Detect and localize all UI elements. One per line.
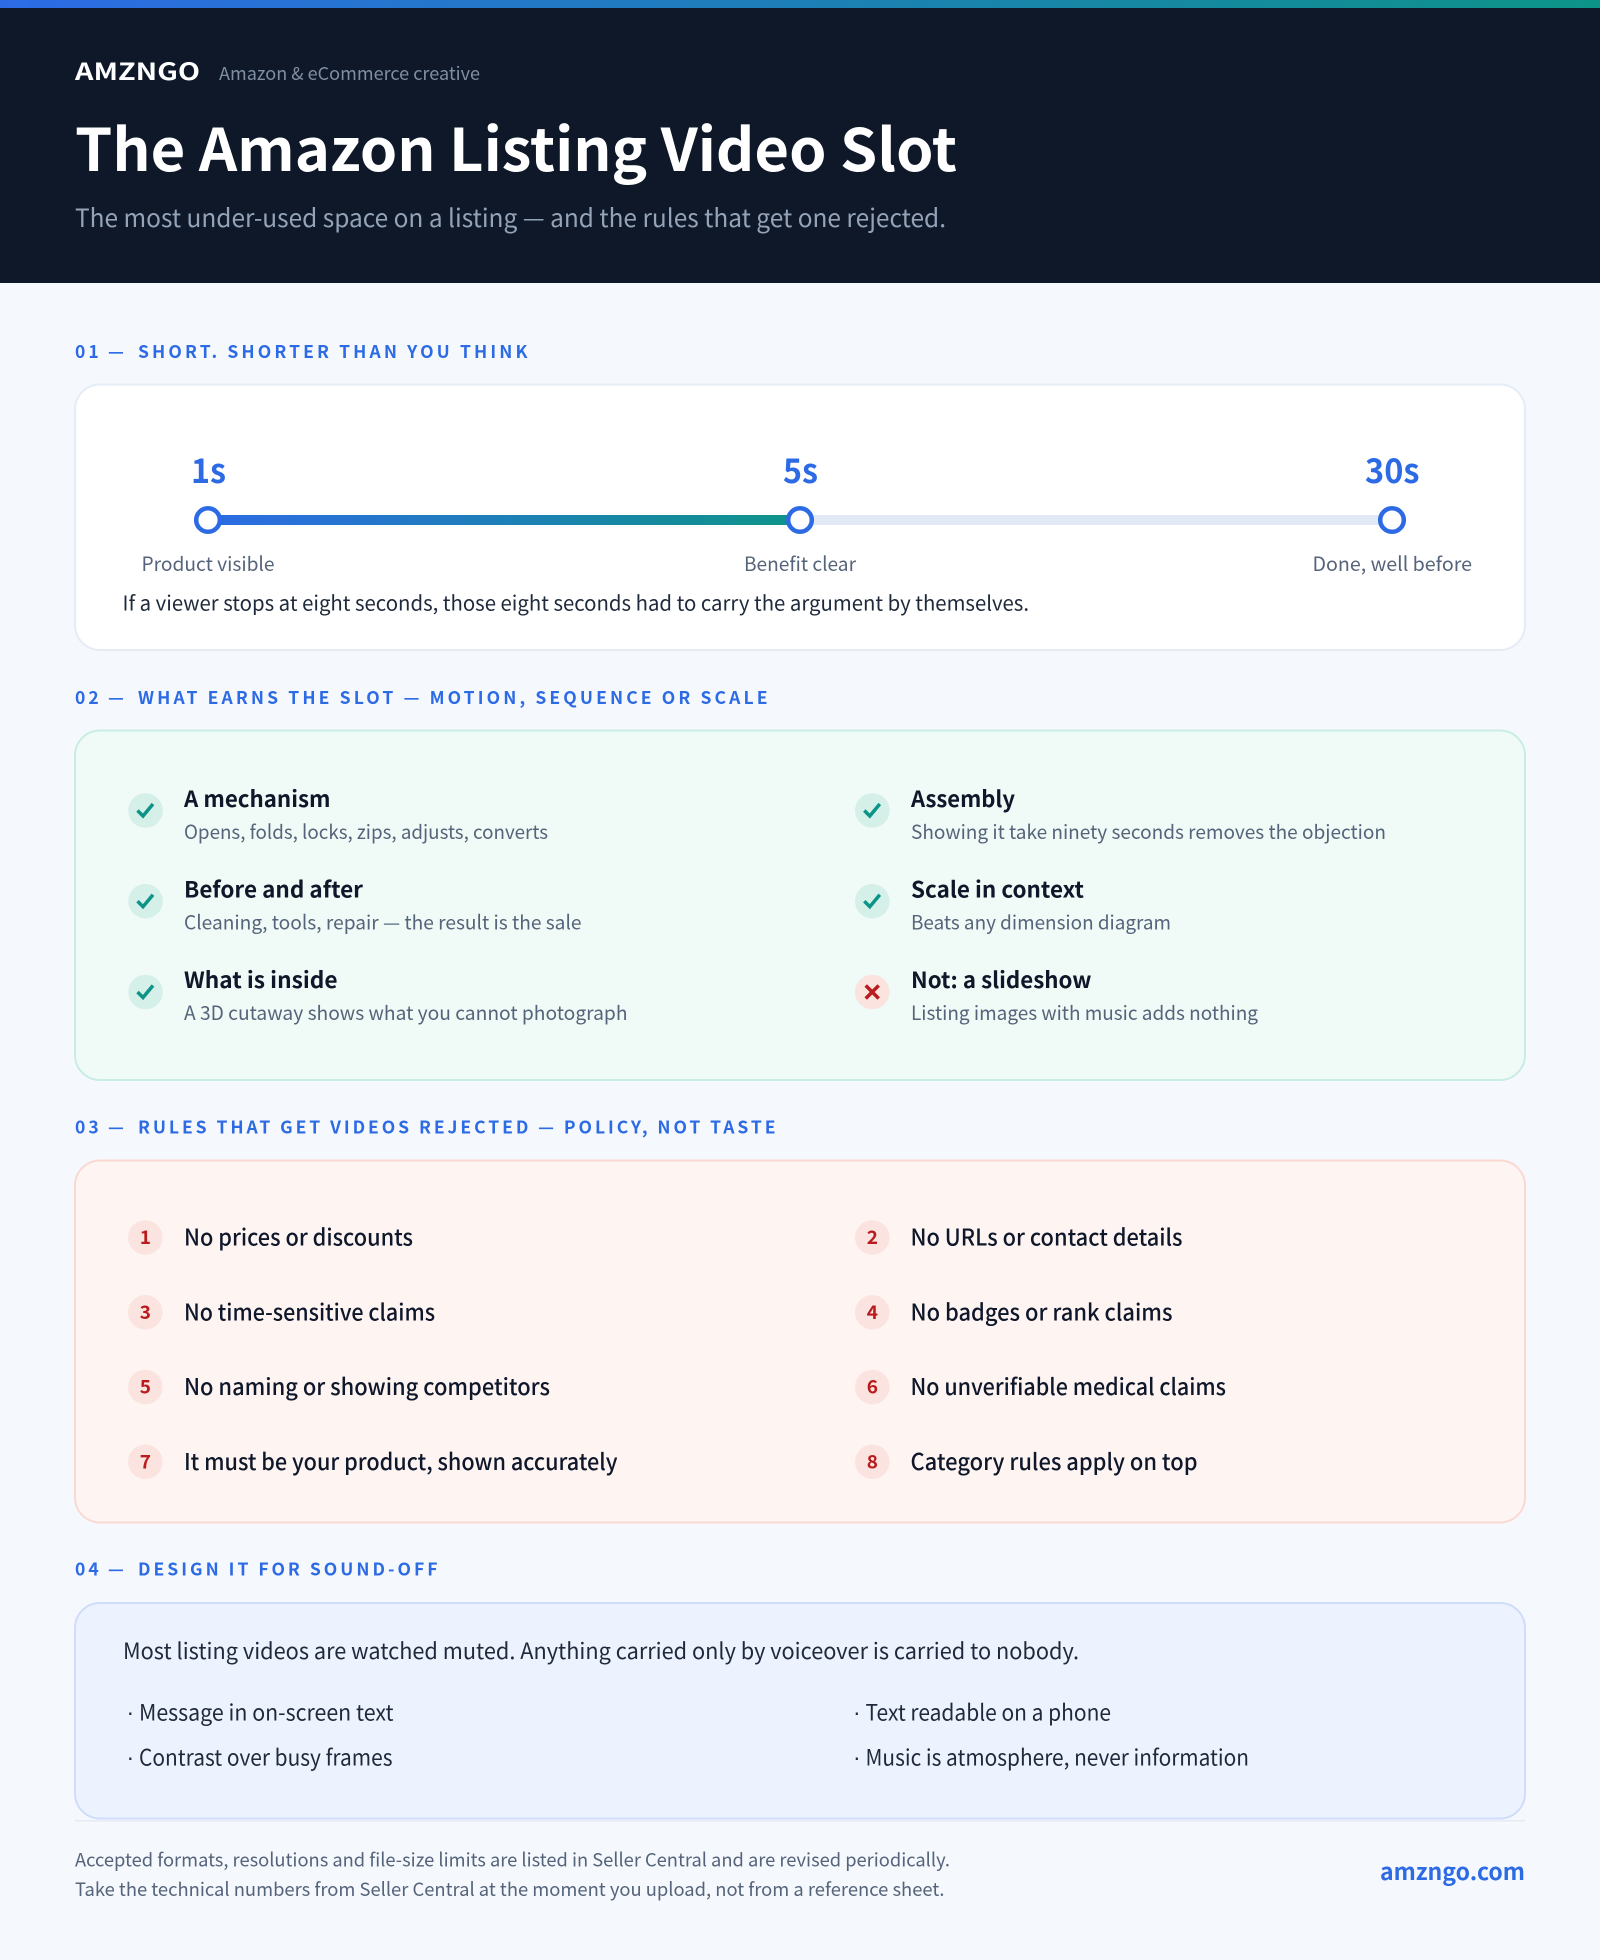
item: not a slideshow [855, 963, 1258, 1026]
item: assembly: Showing it take ninety seconds removes the objection [911, 816, 1386, 845]
heading: section 02: 02 [75, 685, 102, 710]
panel: rejection rules [75, 1160, 1525, 1522]
heading: section 02: — [108, 685, 127, 710]
heading: section 03: RULES THAT GET VIDEOS REJECTED — POLICY, NOT TASTE [138, 1114, 776, 1140]
bullet: readable: · [853, 1699, 861, 1725]
footer url: amzngo.com [1380, 1853, 1525, 1887]
panel: sound-off [75, 1603, 1525, 1818]
rule 8: Category rules apply on top [910, 1443, 1198, 1477]
rule 7: It must be your product, shown accurately [184, 1443, 618, 1477]
timeline track [208, 515, 1392, 525]
marker: 30s: 30s [1365, 444, 1420, 493]
rule 2: No URLs or contact details [910, 1219, 1182, 1253]
brand name: AMZNGO [74, 53, 200, 87]
marker: 30s: Done, well before [1312, 548, 1472, 577]
bullet: on-screen text: · [126, 1699, 134, 1725]
heading: section 03: 03 [75, 1114, 102, 1140]
item: a mechanism [128, 782, 548, 845]
item: before and after: Cleaning, tools, repair — the result is the sale [184, 906, 582, 936]
item: scale in context: Beats any dimension diagram [911, 906, 1171, 936]
marker: 5s: Benefit clear [744, 548, 856, 577]
heading: section 03: — [108, 1114, 127, 1140]
item: not a slideshow: Not: a slideshow [911, 963, 1092, 995]
item: before and after: Before and after [184, 872, 363, 904]
item: a mechanism: Opens, folds, locks, zips, adjusts, converts [184, 816, 548, 845]
bullet: contrast: Contrast over busy frames [139, 1740, 392, 1772]
heading: section 01: — [108, 339, 127, 364]
heading: section 04: — [108, 1556, 127, 1582]
marker: 30s [1312, 444, 1472, 577]
rule 3: 3 [140, 1298, 151, 1325]
rule 3: No time-sensitive claims [184, 1293, 435, 1327]
marker: 1s: 1s [191, 444, 226, 493]
footer note [75, 1846, 950, 1902]
subtitle: The most under-used space on a listing — and the rules that get one rejected. [75, 199, 946, 235]
panel: timeline [75, 384, 1525, 650]
rule 4: 4 [867, 1298, 878, 1325]
footer note: Take the technical numbers from Seller Central at the moment you upload, not from a reference sheet. [75, 1876, 944, 1902]
item: scale in context: Scale in context [911, 872, 1085, 904]
rule 1: No prices or discounts [184, 1219, 413, 1253]
panel: what earns the slot [75, 730, 1525, 1080]
heading: section 01: SHORT. SHORTER THAN YOU THINK [138, 339, 528, 364]
item: what is inside [128, 963, 627, 1026]
item: scale in context [855, 872, 1171, 936]
item: a mechanism: A mechanism [183, 782, 330, 814]
rule 6: 6 [867, 1372, 878, 1400]
rule 7: 7 [140, 1447, 151, 1474]
brand tagline: Amazon & eCommerce creative [219, 60, 480, 86]
item: what is inside: A 3D cutaway shows what you cannot photograph [184, 997, 628, 1026]
rule 8: 8 [867, 1447, 878, 1474]
sound-off intro: Most listing videos are watched muted. Anything carried only by voiceover is carried to nobody. [123, 1634, 1079, 1666]
heading: section 04: DESIGN IT FOR SOUND-OFF [138, 1556, 438, 1582]
marker: 5s [744, 444, 856, 577]
heading: section 01: 01 [75, 339, 102, 364]
marker: 1s [142, 444, 274, 577]
item: assembly: Assembly [910, 782, 1015, 814]
footer note: Accepted formats, resolutions and file-size limits are listed in Seller Central and are revised periodically. [75, 1846, 950, 1872]
item: what is inside: What is inside [184, 963, 338, 995]
marker: 5s: 5s [783, 444, 818, 493]
item: not a slideshow: Listing images with music adds nothing [911, 997, 1258, 1026]
header band [0, 0, 1600, 283]
bullet: music: · [853, 1744, 861, 1770]
rule 6: No unverifiable medical claims [910, 1368, 1226, 1402]
bullet: music: Music is atmosphere, never information [866, 1740, 1249, 1772]
heading: section 04: 04 [75, 1556, 102, 1582]
bullet: on-screen text: Message in on-screen text [139, 1696, 394, 1728]
bullet: contrast: · [126, 1744, 134, 1770]
heading: section 02: WHAT EARNS THE SLOT — MOTION, SEQUENCE OR SCALE [138, 685, 768, 710]
item: before and after [128, 872, 581, 936]
bullet: readable: Text readable on a phone [866, 1696, 1111, 1728]
title: The Amazon Listing Video Slot [75, 103, 957, 188]
marker: 1s: Product visible [142, 548, 274, 577]
rule 2: 2 [867, 1223, 878, 1250]
rule 4: No badges or rank claims [910, 1293, 1172, 1327]
rule 1: 1 [140, 1223, 151, 1250]
item: assembly [855, 782, 1386, 845]
timeline note: If a viewer stops at eight seconds, those eight seconds had to carry the argument by themselves. [122, 586, 1029, 616]
rule 5: 5 [140, 1372, 151, 1400]
rule 5: No naming or showing competitors [184, 1368, 550, 1402]
